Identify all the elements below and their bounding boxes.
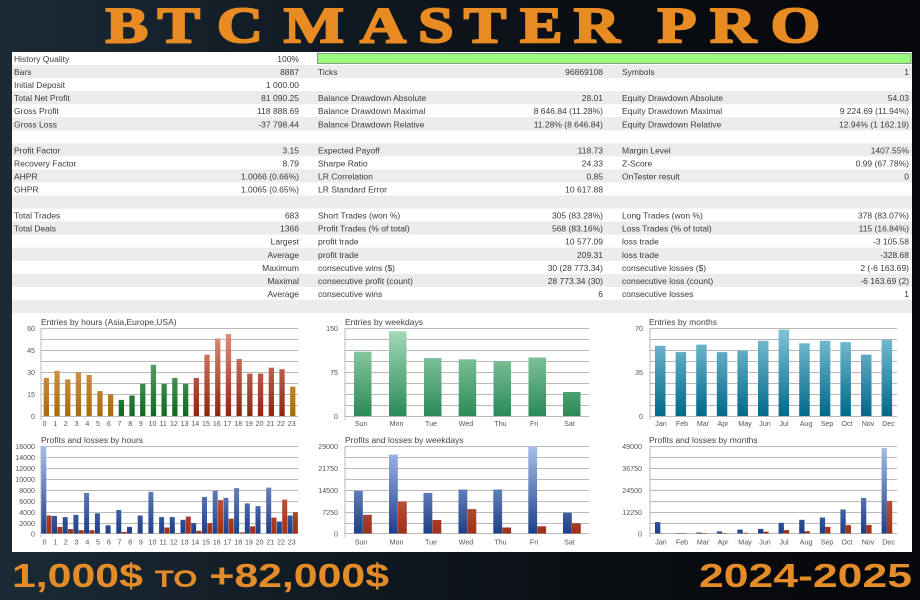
chart: entries by hours: 17 <box>224 420 231 428</box>
chart: entries by months: Entries by months <box>649 317 717 327</box>
chart: entries by weekdays: Fri <box>530 420 539 428</box>
chart: profits and losses by hours: 1 <box>53 538 57 546</box>
chart: entries by months: Feb <box>676 420 688 428</box>
chart: profits and losses by months: Jan <box>655 538 667 546</box>
stats row: Maximal: Maximal <box>267 276 299 286</box>
chart: profits and losses by weekdays: 21750 <box>318 465 338 473</box>
chart: profits and losses by hours: 12000 <box>15 465 35 473</box>
chart: profits and losses by hours: 19 <box>245 538 253 546</box>
chart: entries by months: Nov <box>862 420 875 428</box>
stats row: Average consecutive: 1 <box>904 289 909 299</box>
chart: profits and losses by hours: 2000 <box>19 520 35 528</box>
chart: entries by months: 70 <box>635 325 643 333</box>
chart: entries by hours: 9 <box>139 420 143 428</box>
stats row: Maximal: consecutive loss (count) <box>622 276 713 286</box>
stats row: Profit Factor: Expected Payoff <box>318 145 380 155</box>
chart: entries by months: Sep <box>821 420 833 428</box>
chart: entries by hours: 8 <box>128 420 132 428</box>
stats row: Initial Deposit: Initial Deposit <box>14 80 66 90</box>
chart: entries by hours: 15 <box>27 391 35 399</box>
chart: profits and losses by hours: 16000 <box>15 443 35 451</box>
stats row: Gross Profit: 8 646.84 (11.28%) <box>534 106 603 116</box>
chart: entries by weekdays: Sun <box>355 420 367 428</box>
stats row: Largest <box>271 237 909 247</box>
stats row: Total Trades: Total Trades <box>14 211 60 221</box>
chart: profits and losses by weekdays: 29000 <box>318 443 338 451</box>
stats row: Recovery Factor: Z-Score <box>622 158 652 168</box>
chart: profits and losses by months: Nov <box>862 538 875 546</box>
chart: profits and losses by months <box>622 435 897 546</box>
stats row: Profit Factor <box>14 145 909 155</box>
chart: entries by hours: 0 <box>43 420 47 428</box>
chart: profits and losses by hours: 16 <box>213 538 221 546</box>
stats row: Gross Profit: Gross Profit <box>14 106 60 116</box>
stats row: Initial Deposit <box>14 80 299 90</box>
stats row: Bars: Bars <box>14 67 31 77</box>
stats row: Bars <box>14 67 909 77</box>
chart: profits and losses by hours: 18 <box>234 538 242 546</box>
chart: entries by hours: 18 <box>234 420 242 428</box>
stats row: Largest: 10 577.09 <box>565 237 603 247</box>
stats row: Gross Loss: 12.94% (1 162.19) <box>839 119 909 129</box>
stats row: Recovery Factor: Recovery Factor <box>14 158 77 168</box>
chart: profits and losses by months: Dec <box>882 538 895 546</box>
chart: profits and losses by weekdays: Mon <box>390 538 403 546</box>
chart: entries by hours: 1 <box>53 420 57 428</box>
chart: profits and losses by hours: 2 <box>64 538 68 546</box>
chart: profits and losses by months: 49000 <box>622 443 642 451</box>
stats row: Total Net Profit: 81 090.25 <box>261 93 299 103</box>
chart: profits and losses by months: Jul <box>779 538 789 546</box>
chart: profits and losses by weekdays: Tue <box>425 538 437 546</box>
chart: profits and losses by hours: 10000 <box>15 476 35 484</box>
chart: entries by months: Jul <box>779 420 789 428</box>
stats row: Average consecutive <box>267 289 909 299</box>
chart: entries by weekdays <box>326 317 589 428</box>
chart: entries by hours: 2 <box>64 420 68 428</box>
chart: entries by months: May <box>738 420 752 428</box>
stats row: GHPR <box>14 184 603 194</box>
stats row: Total Trades: 683 <box>285 211 299 221</box>
stats row: Total Deals: Profit Trades (% of total) <box>318 224 410 234</box>
stats row: Recovery Factor <box>14 158 909 168</box>
chart: entries by hours: 3 <box>75 420 79 428</box>
stats row: Gross Loss: 11.28% (8 646.84) <box>534 119 603 129</box>
stats row: AHPR: AHPR <box>14 171 38 181</box>
stats row: Total Net Profit <box>14 93 909 103</box>
chart: profits and losses by months: Jun <box>759 538 771 546</box>
stats row: Average trade: loss trade <box>622 250 659 260</box>
stats row: AHPR: LR Correlation <box>318 171 373 181</box>
stats row: Bars: 8887 <box>280 67 299 77</box>
chart: entries by hours: 10 <box>149 420 156 428</box>
chart: profits and losses by weekdays: Fri <box>530 538 539 546</box>
chart: entries by hours: 30 <box>27 369 35 377</box>
stats row: Recovery Factor: 8.79 <box>282 158 299 168</box>
chart: profits and losses by months: 36750 <box>622 465 642 473</box>
stats row: Profit Factor: Profit Factor <box>14 145 60 155</box>
stats row: Profit Factor: 3.15 <box>282 145 299 155</box>
stats row: Maximum: 30 (28 773.34) <box>548 263 603 273</box>
chart: entries by weekdays: Sat <box>564 420 575 428</box>
stats row: Gross Profit <box>14 106 909 116</box>
footer: deposit growth: 1,000$ TO +82,000$ <box>12 557 389 594</box>
chart: profits and losses by months: 24500 <box>622 487 642 495</box>
chart: profits and losses by weekdays: 14500 <box>318 487 338 495</box>
stats row: Total Trades: Long Trades (won %) <box>622 211 703 221</box>
chart: profits and losses by months: Feb <box>676 538 688 546</box>
stats row: Total Trades: 378 (83.07%) <box>858 211 909 221</box>
chart: profits and losses by months: 0 <box>638 530 642 538</box>
stats row: Gross Loss: Equity Drawdown Relative <box>622 119 721 129</box>
stats row: Initial Deposit: 1 000.00 <box>266 80 299 90</box>
stats row: Maximal: -6 163.69 (2) <box>860 276 909 286</box>
chart: profits and losses by hours: 8000 <box>19 487 35 495</box>
chart: profits and losses by hours: 14000 <box>15 454 35 462</box>
chart: entries by months: Jun <box>759 420 771 428</box>
stats row: Gross Loss: Balance Drawdown Relative <box>318 119 425 129</box>
stats row: Profit Factor: Margin Level <box>622 145 671 155</box>
chart: profits and losses by hours: 4 <box>85 538 89 546</box>
chart: profits and losses by months: Sep <box>821 538 833 546</box>
chart: entries by hours: 22 <box>277 420 285 428</box>
chart: entries by hours: 23 <box>288 420 296 428</box>
chart: entries by weekdays: Tue <box>425 420 437 428</box>
stats row: Total Deals: 1366 <box>280 224 299 234</box>
stats row: Average trade: -328.68 <box>880 250 909 260</box>
stats row: Total Net Profit: Total Net Profit <box>14 93 70 103</box>
chart: entries by months: 0 <box>639 413 643 421</box>
chart: profits and losses by weekdays <box>318 435 589 546</box>
chart: entries by hours: 0 <box>31 413 35 421</box>
stats row: Gross Profit: 118 888.69 <box>257 106 299 116</box>
chart: profits and losses by hours: 7 <box>118 538 122 546</box>
stats row: Average consecutive: consecutive losses <box>622 289 693 299</box>
chart: entries by hours: 12 <box>170 420 178 428</box>
chart: profits and losses by hours: 23 <box>288 538 296 546</box>
stats row: Gross Loss: Gross Loss <box>14 119 57 129</box>
stats row: Total Net Profit: 28.01 <box>582 93 603 103</box>
chart: entries by weekdays: 75 <box>330 369 338 377</box>
chart: entries by hours: 60 <box>27 325 35 333</box>
chart: profits and losses by hours: 15 <box>202 538 210 546</box>
history quality bar <box>318 54 911 64</box>
chart: entries by months <box>635 317 897 428</box>
chart: entries by hours: Entries by hours (Asia,Europe,USA) <box>41 317 177 327</box>
chart: entries by months: Mar <box>697 420 710 428</box>
chart: profits and losses by hours: 13 <box>181 538 189 546</box>
chart: entries by hours: 11 <box>160 420 167 428</box>
stats row: Maximal: consecutive profit (count) <box>318 276 413 286</box>
stats row: Average consecutive: consecutive wins <box>318 289 382 299</box>
stats row: History Quality: 100% <box>277 54 299 64</box>
stats row: Gross Profit: 9 224.69 (11.94%) <box>840 106 909 116</box>
chart: profits and losses by hours: 6000 <box>19 498 35 506</box>
stats row: Maximum: 2 (-6 163.69) <box>860 263 909 273</box>
chart: entries by hours: 4 <box>85 420 89 428</box>
chart: profits and losses by hours: 11 <box>160 538 167 546</box>
stats row: Bars: 1 <box>904 67 909 77</box>
chart: profits and losses by weekdays: 7250 <box>322 509 338 517</box>
chart: entries by hours: 13 <box>181 420 189 428</box>
chart: profits and losses by hours: 21 <box>266 538 274 546</box>
chart: entries by months: Apr <box>717 420 729 428</box>
chart: entries by hours: 45 <box>27 347 35 355</box>
stats row: Maximal: 28 773.34 (30) <box>548 276 603 286</box>
chart: profits and losses by hours: Profits and losses by hours <box>41 435 143 445</box>
stats row: Maximum: Maximum <box>262 263 299 273</box>
stats row: Total Deals: 115 (16.84%) <box>859 224 909 234</box>
chart: profits and losses by hours: 10 <box>149 538 156 546</box>
chart: profits and losses by hours: 17 <box>224 538 231 546</box>
stats row: Total Net Profit: Balance Drawdown Absolute <box>318 93 426 103</box>
stats row: Average trade <box>267 250 909 260</box>
chart: profits and losses by months: Aug <box>800 538 812 546</box>
chart: profits and losses by weekdays: Sat <box>564 538 575 546</box>
chart: profits and losses by hours: 5 <box>96 538 100 546</box>
stats row: Total Deals <box>14 224 909 234</box>
stats row: Maximum: consecutive losses ($) <box>622 263 706 273</box>
stats row: Largest: -3 105.58 <box>873 237 909 247</box>
chart: profits and losses by weekdays: Sun <box>355 538 367 546</box>
stats row: Maximum: consecutive wins ($) <box>318 263 395 273</box>
footer: date range: 2024-2025 <box>699 557 912 594</box>
stats row: Total Trades: Short Trades (won %) <box>318 211 400 221</box>
chart: profits and losses by hours: 8 <box>128 538 132 546</box>
stats row: Total Net Profit: Equity Drawdown Absolute <box>622 93 723 103</box>
stats row: Bars: Ticks <box>318 67 338 77</box>
stats row: Average trade: 209.31 <box>577 250 603 260</box>
stats row: Profit Factor: 1407.55% <box>871 145 909 155</box>
chart: entries by hours: 7 <box>118 420 122 428</box>
chart: profits and losses by hours: 20 <box>256 538 264 546</box>
chart: profits and losses by months: May <box>738 538 752 546</box>
stats row: Gross Loss <box>14 119 909 129</box>
stats row: Profit Factor: 118.73 <box>578 145 603 155</box>
stats row: AHPR: 0.85 <box>586 171 603 181</box>
chart: profits and losses by hours: 3 <box>75 538 79 546</box>
stats row: Average consecutive: 6 <box>598 289 603 299</box>
stats row: Average consecutive: Average <box>267 289 299 299</box>
stats row: Total Deals: 568 (83.16%) <box>552 224 603 234</box>
chart: profits and losses by weekdays: Profits and losses by weekdays <box>345 435 464 445</box>
stats row: Gross Loss: -37 798.44 <box>258 119 299 129</box>
chart: entries by hours: 19 <box>245 420 253 428</box>
stats row: History Quality <box>14 54 299 64</box>
stats row: Gross Profit: Equity Drawdown Maximal <box>622 106 722 116</box>
chart: profits and losses by months: Apr <box>717 538 729 546</box>
stats row: Total Trades: 305 (83.28%) <box>552 211 603 221</box>
chart: entries by weekdays: Mon <box>390 420 403 428</box>
chart: profits and losses by months: Mar <box>697 538 710 546</box>
chart: entries by hours: 6 <box>107 420 111 428</box>
chart: entries by hours: 5 <box>96 420 100 428</box>
stats row: Largest: profit trade <box>318 237 359 247</box>
chart: profits and losses by months: Oct <box>841 538 853 546</box>
chart: entries by hours: 14 <box>191 420 199 428</box>
stats row: Bars: 96869108 <box>565 67 603 77</box>
chart: entries by weekdays: Wed <box>459 420 473 428</box>
chart: profits and losses by hours: 6 <box>107 538 111 546</box>
chart: profits and losses by months: 12250 <box>622 509 642 517</box>
chart: profits and losses by hours: 0 <box>43 538 47 546</box>
stats row: Recovery Factor: 0.99 (67.78%) <box>856 158 909 168</box>
stats row: Maximal <box>267 276 909 286</box>
stats row: Average trade: Average <box>267 250 299 260</box>
stats row: Recovery Factor: Sharpe Ratio <box>318 158 368 168</box>
chart: entries by hours: 21 <box>266 420 274 428</box>
chart: entries by weekdays: Thu <box>494 420 507 428</box>
chart: profits and losses by weekdays: Thu <box>494 538 507 546</box>
stats row: Gross Profit: Balance Drawdown Maximal <box>318 106 425 116</box>
chart: entries by weekdays: Entries by weekdays <box>345 317 423 327</box>
stats row: AHPR <box>14 171 909 181</box>
stats row: Total Deals: Loss Trades (% of total) <box>622 224 712 234</box>
chart: entries by months: Dec <box>882 420 895 428</box>
chart: profits and losses by hours: 0 <box>31 530 35 538</box>
stats row: Total Deals: Total Deals <box>14 224 56 234</box>
stats row: AHPR: 1.0066 (0.66%) <box>241 171 299 181</box>
stats row: Bars: Symbols <box>622 67 655 77</box>
chart: entries by months: Aug <box>800 420 812 428</box>
stats row: Largest: Largest <box>271 237 300 247</box>
chart: profits and losses by hours: 9 <box>139 538 143 546</box>
stats row: Recovery Factor: 24.33 <box>582 158 603 168</box>
stats row: AHPR: OnTester result <box>622 171 680 181</box>
chart: entries by months: Oct <box>841 420 853 428</box>
chart: profits and losses by months: Profits and losses by months <box>649 435 758 445</box>
chart: entries by hours: 20 <box>256 420 264 428</box>
stats row: Largest: loss trade <box>622 237 659 247</box>
chart: entries by months: Jan <box>655 420 667 428</box>
stats row: AHPR: 0 <box>904 171 909 181</box>
chart: profits and losses by hours: 12 <box>170 538 178 546</box>
stats row: History Quality: History Quality <box>14 54 70 64</box>
chart: profits and losses by weekdays: Wed <box>459 538 473 546</box>
stats row: Total Trades <box>14 211 909 221</box>
chart: entries by hours: 16 <box>213 420 221 428</box>
chart: profits and losses by weekdays: 0 <box>334 530 338 538</box>
chart: entries by months: 35 <box>635 369 643 377</box>
chart: entries by hours: 15 <box>202 420 210 428</box>
stats table <box>12 54 912 313</box>
chart: profits and losses by hours <box>15 435 298 546</box>
chart: entries by weekdays: 150 <box>326 325 338 333</box>
stats row: Average trade: profit trade <box>318 250 359 260</box>
chart: entries by hours <box>27 317 298 428</box>
stats row: Maximum <box>262 263 909 273</box>
stats row: Total Net Profit: 54.03 <box>888 93 909 103</box>
chart: entries by weekdays: 0 <box>334 413 338 421</box>
stats row: GHPR: LR Standard Error <box>318 184 387 194</box>
chart: profits and losses by hours: 14 <box>191 538 199 546</box>
stats row: GHPR: 10 617.88 <box>565 184 603 194</box>
chart: profits and losses by hours: 4000 <box>19 509 35 517</box>
stats row: GHPR: 1.0065 (0.65%) <box>241 184 299 194</box>
chart: profits and losses by hours: 22 <box>277 538 285 546</box>
stats row: GHPR: GHPR <box>14 184 39 194</box>
